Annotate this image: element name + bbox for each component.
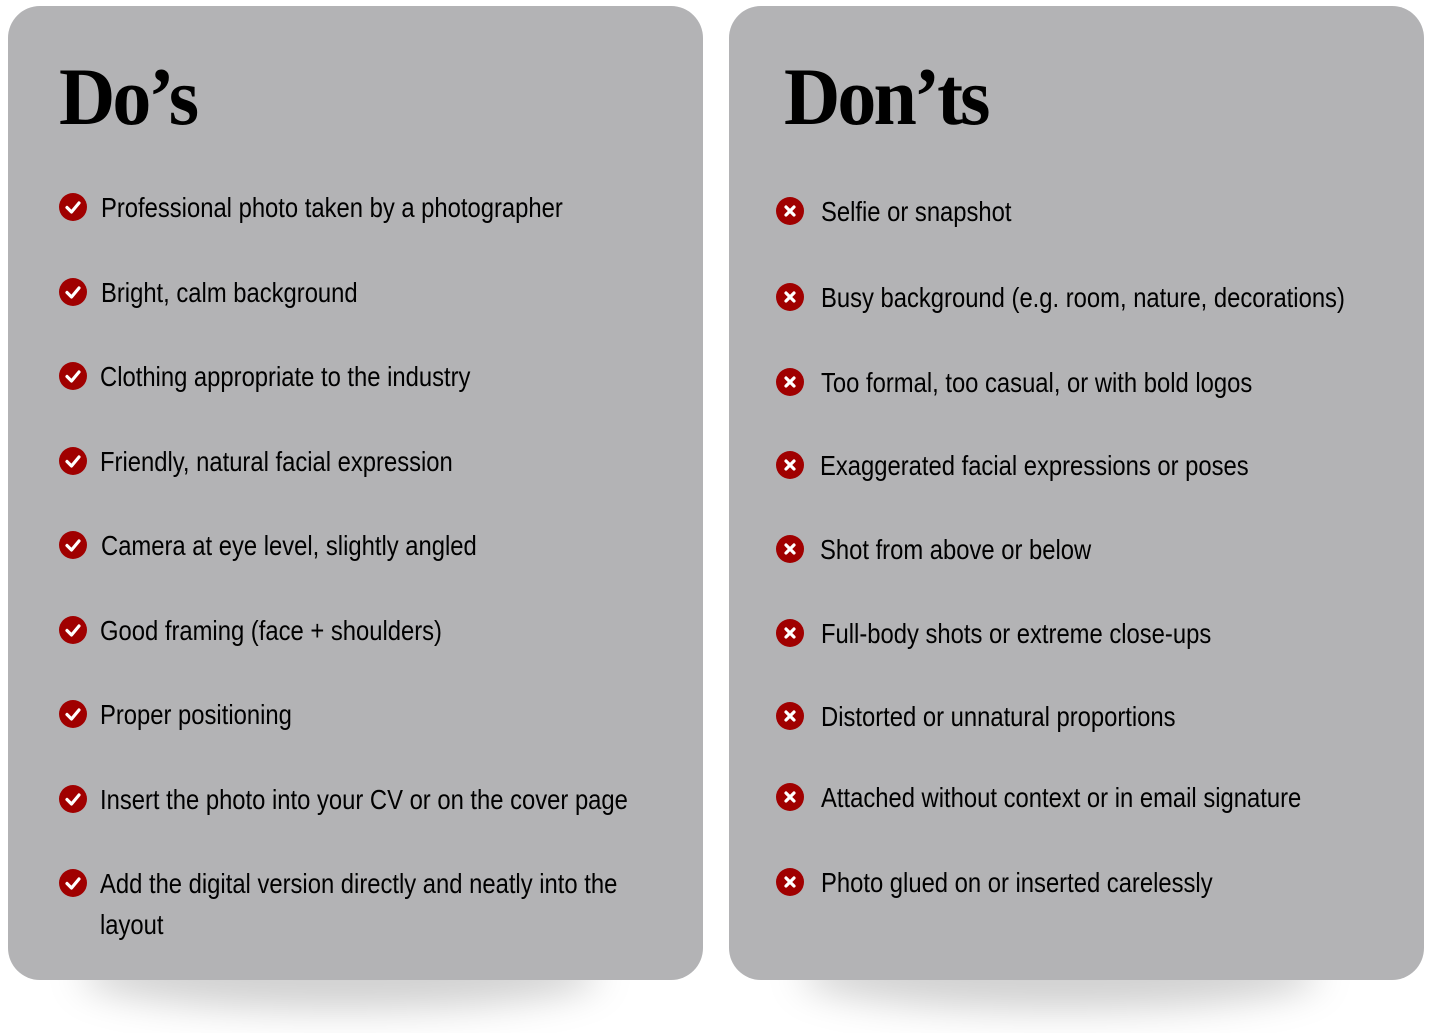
title: Don'ts: Don’ts	[784, 51, 988, 142]
item 9: Photo glued on or inserted carelessly	[821, 867, 1213, 898]
item 9	[59, 868, 617, 940]
item 3: Too formal, too casual, or with bold logos	[821, 367, 1252, 398]
item 4: Friendly, natural facial expression	[100, 446, 453, 477]
panel: don'ts	[729, 6, 1424, 980]
item 4: Exaggerated facial expressions or poses	[820, 450, 1249, 481]
item 5: Camera at eye level, slightly angled	[101, 530, 477, 561]
item 1: Selfie or snapshot	[821, 196, 1012, 227]
item 9: layout	[100, 909, 164, 940]
item 2: Busy background (e.g. room, nature, decorations)	[821, 282, 1345, 313]
item 7: Distorted or unnatural proportions	[821, 701, 1176, 732]
panel: do's	[8, 6, 703, 980]
title: Do's: Do’s	[59, 51, 196, 142]
item 6: Good framing (face + shoulders)	[100, 615, 442, 646]
item 7: Proper positioning	[100, 699, 292, 730]
item 8: Insert the photo into your CV or on the cover page	[100, 784, 628, 815]
item 8: Attached without context or in email signature	[821, 782, 1301, 813]
item 3: Clothing appropriate to the industry	[100, 361, 470, 392]
item 5: Shot from above or below	[820, 534, 1091, 565]
item 9: Add the digital version directly and neatly into the	[100, 868, 617, 899]
item 2: Bright, calm background	[101, 277, 358, 308]
item 1: Professional photo taken by a photographer	[101, 192, 563, 223]
item 6: Full-body shots or extreme close-ups	[821, 618, 1211, 649]
